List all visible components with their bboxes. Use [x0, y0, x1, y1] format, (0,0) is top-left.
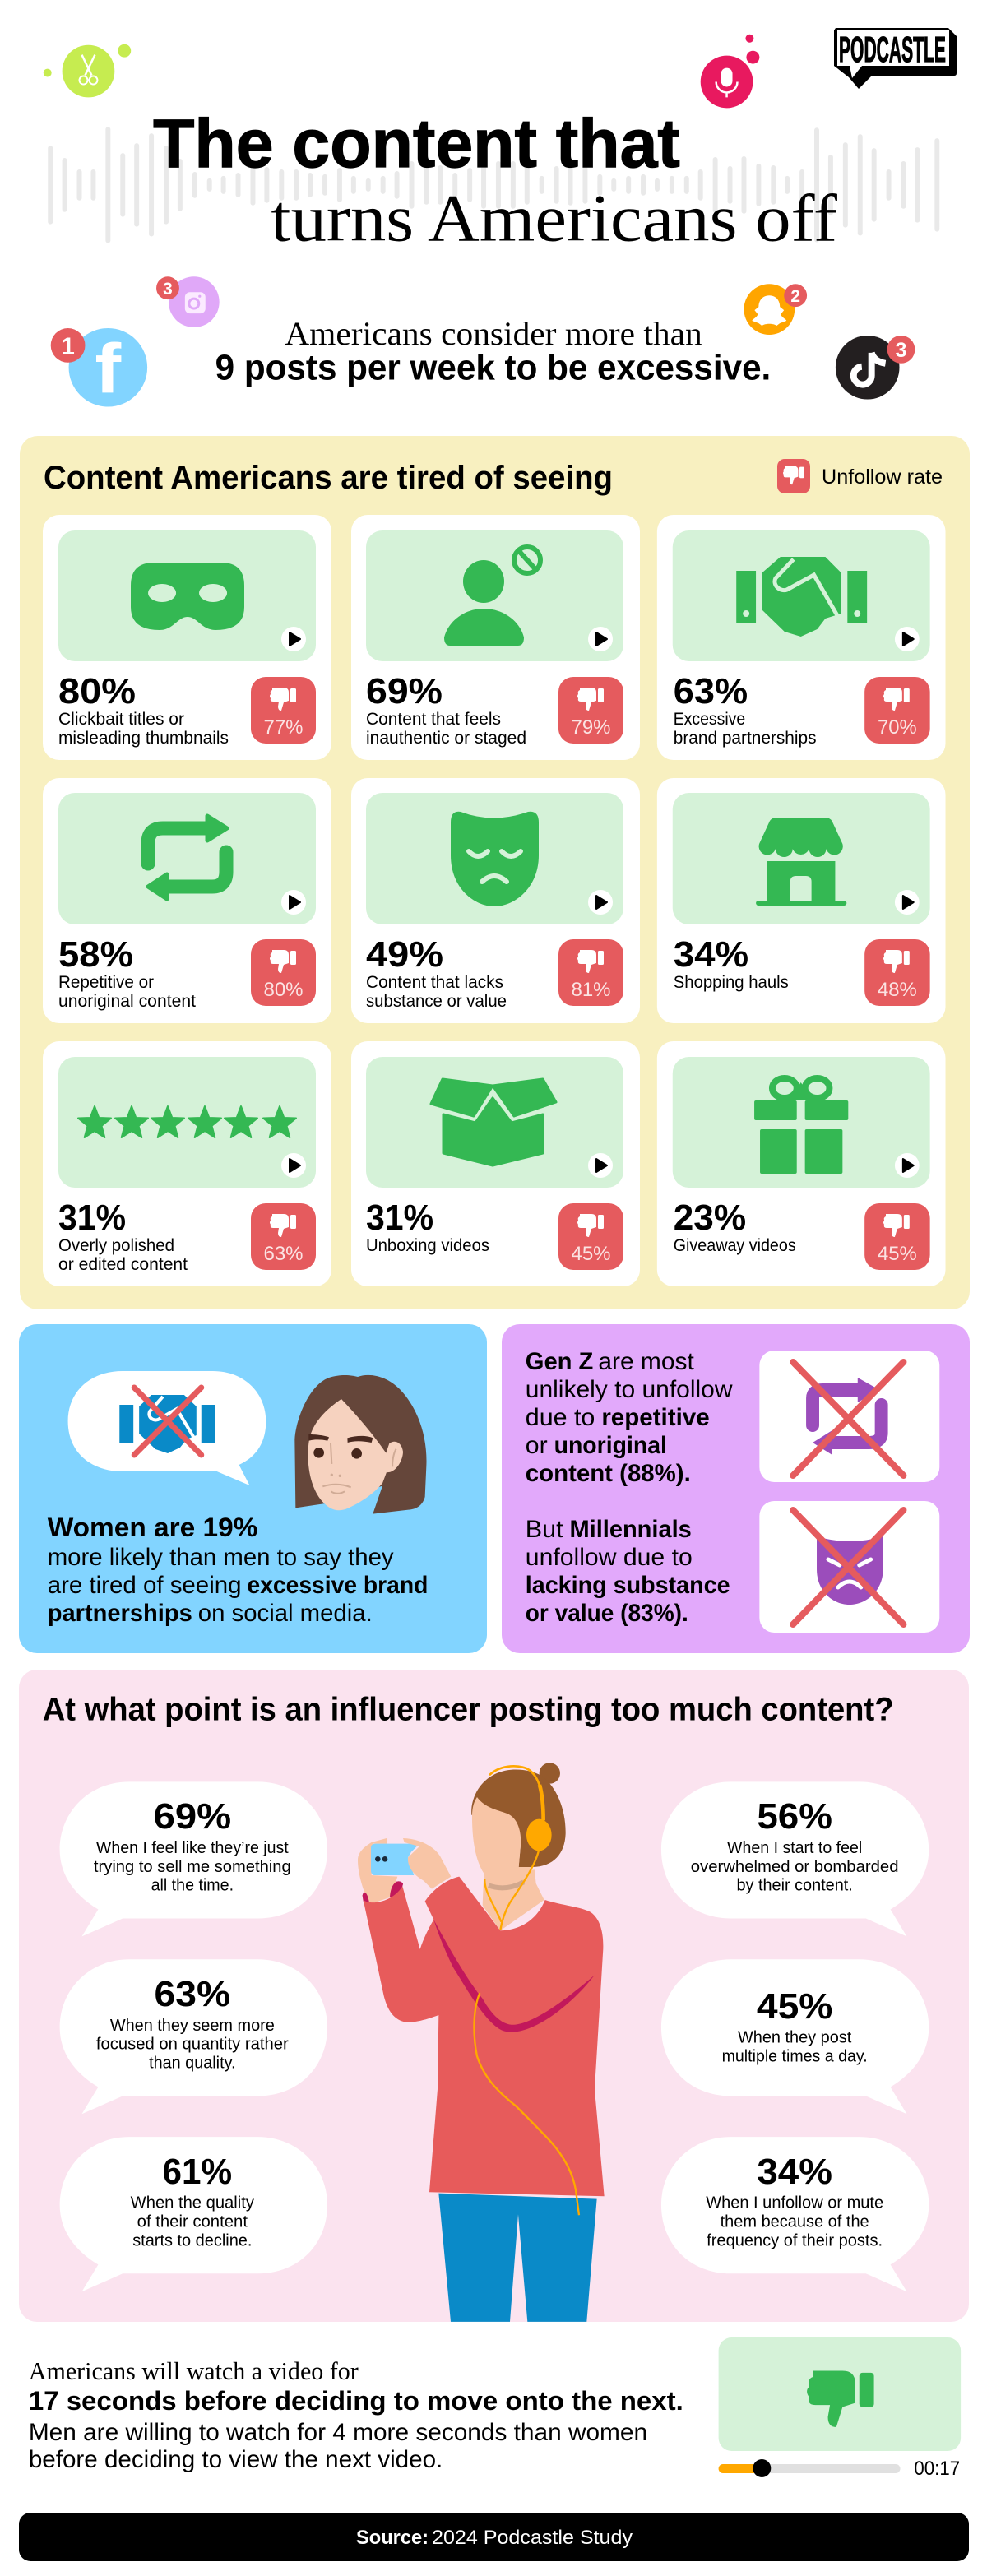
badge: unfollow 48%	[864, 939, 930, 1006]
card: lacks substance	[351, 778, 640, 1023]
bubble: 63%	[60, 1959, 327, 2114]
card: giveaway: 23%	[674, 1198, 746, 1238]
title: The content that	[153, 104, 680, 182]
icon: microphone bubble	[701, 35, 759, 108]
text: Millennials	[526, 1516, 730, 1627]
bubble: 69%: all the time.	[151, 1877, 234, 1895]
badge: unfollow 70%	[864, 677, 930, 744]
icon: facebook with badge: 1	[61, 333, 75, 360]
icon: open box	[431, 1079, 556, 1165]
card: inauthentic: 69%	[366, 671, 443, 711]
subtitle: 9 posts per week to be excessive.	[215, 348, 771, 388]
card: clickbait: Clickbait titles or	[58, 710, 184, 729]
card: overly polished	[43, 1041, 331, 1286]
panel: women callout	[19, 1324, 487, 1653]
bubble: 34%	[661, 2137, 929, 2291]
text: Millennials: Millennials	[570, 1516, 692, 1543]
illustration: person with phone	[358, 1763, 605, 2322]
subtitle: Americans consider more than	[285, 316, 702, 352]
text: Gen Z	[526, 1348, 733, 1487]
card: unboxing: Unboxing videos	[366, 1236, 489, 1255]
text: Millennials: or value (83%).	[526, 1600, 688, 1627]
bubble: 45%: When they post	[738, 2029, 852, 2047]
card: repetitive: Repetitive or	[58, 973, 154, 992]
card: lacks substance: substance or value	[366, 992, 507, 1011]
text: Gen Z: content (88%).	[526, 1460, 691, 1487]
heading: At what point is an influencer posting too much content?	[43, 1692, 894, 1728]
icon: repeat arrows	[148, 816, 227, 899]
text: video watch time: Americans will watch a video for	[29, 2356, 359, 2385]
card: shopping hauls	[657, 778, 946, 1023]
badge: unfollow 48%: 48%	[878, 979, 917, 1001]
icon: crossed repeat	[759, 1351, 939, 1482]
bubble: 56%: When I start to feel	[727, 1839, 862, 1857]
illustration: woman face	[294, 1375, 426, 1514]
card: repetitive: unoriginal content	[58, 992, 196, 1011]
bubble: 45%	[661, 1959, 929, 2114]
bubble: 69%: trying to sell me something	[94, 1858, 291, 1876]
badge: unfollow 63%: 63%	[263, 1243, 304, 1265]
text: video watch time	[29, 2356, 683, 2473]
bubble: 45%: multiple times a day.	[722, 2048, 868, 2066]
bubble: 56%: by their content.	[737, 1877, 853, 1895]
card: unboxing	[351, 1041, 640, 1286]
bubble: 34%: 34%	[757, 2152, 832, 2192]
card: brand partnerships: brand partnerships	[674, 729, 817, 748]
bubble: 61%	[60, 2137, 327, 2291]
card: clickbait: misleading thumbnails	[58, 729, 229, 748]
icon: mask	[131, 563, 244, 630]
badge: unfollow 45%	[864, 1203, 930, 1270]
icon: crossed mask	[759, 1501, 939, 1633]
panel: content Americans are tired of seeing	[20, 436, 970, 1309]
badge: unfollow 45%	[558, 1203, 623, 1270]
text: Millennials: But	[526, 1516, 563, 1543]
icon: instagram with badge	[156, 276, 220, 327]
bubble: 63%: than quality.	[149, 2055, 236, 2073]
text block: excessive brand	[247, 1572, 428, 1599]
heading: Content Americans are tired of seeing	[44, 460, 613, 496]
badge: unfollow 77%	[251, 677, 316, 744]
bubble: 61%: of their content	[137, 2213, 248, 2231]
icon: tiktok with badge: 3	[896, 339, 906, 362]
bubble: 56%: overwhelmed or bombarded	[691, 1858, 899, 1876]
icon: facebook with badge	[51, 328, 147, 409]
card: lacks substance: 49%	[366, 934, 443, 975]
card: brand partnerships: 63%	[674, 671, 748, 711]
icon: snapchat with badge: 2	[790, 287, 800, 306]
text: Millennials: lacking substance	[526, 1572, 730, 1599]
progress bar	[719, 2458, 960, 2480]
badge: unfollow 79%	[558, 677, 623, 744]
card: giveaway: Giveaway videos	[674, 1236, 796, 1255]
icon: tiktok with badge	[836, 336, 915, 400]
icon: thumbs down	[807, 2370, 874, 2427]
icon: sad mask	[451, 812, 539, 906]
card: repetitive	[43, 778, 331, 1023]
bubble: 63%: 63%	[155, 1974, 230, 2014]
text: Gen Z: due to	[526, 1404, 595, 1431]
badge: unfollow 81%	[558, 939, 623, 1006]
badge: unfollow 77%: 77%	[263, 716, 304, 739]
text: Gen Z: repetitive	[601, 1404, 710, 1431]
text block: Women are 19%	[48, 1513, 257, 1542]
card: shopping hauls: Shopping hauls	[674, 973, 789, 992]
card: inauthentic: Content that feels	[366, 710, 501, 729]
bubble: 61%: 61%	[163, 2152, 232, 2192]
card: overly polished: Overly polished	[58, 1236, 174, 1255]
card: unboxing: 31%	[366, 1198, 433, 1238]
text block: partnerships	[48, 1600, 192, 1627]
card: repetitive: 58%	[58, 934, 133, 975]
badge: unfollow 45%: 45%	[571, 1243, 611, 1265]
bubble: 56%	[661, 1781, 929, 1936]
badge: unfollow 80%: 80%	[263, 979, 304, 1001]
progress bar: 00:17	[914, 2458, 960, 2480]
bubble: 69%: 69%	[154, 1796, 231, 1837]
source bar: Source:	[356, 2527, 429, 2549]
bubble: 34%: frequency of their posts.	[707, 2231, 883, 2249]
card: brand partnerships: Excessive	[674, 710, 745, 729]
badge: unfollow 63%	[251, 1203, 316, 1270]
legend: unfollow rate	[777, 459, 943, 493]
source bar: 2024 Podcastle Study	[432, 2527, 633, 2549]
icon: instagram with badge: 3	[163, 280, 173, 299]
text: Gen Z: are most	[598, 1348, 694, 1375]
card: lacks substance: Content that lacks	[366, 973, 503, 992]
video player	[719, 2337, 961, 2480]
text block: are tired of seeing	[48, 1572, 242, 1599]
bubble: 45%: 45%	[757, 1986, 832, 2027]
card: overly polished: 31%	[58, 1198, 126, 1238]
badge: unfollow 80%	[251, 939, 316, 1006]
icon: six stars	[78, 1106, 296, 1137]
icon: person with ban sign	[444, 547, 540, 646]
card: shopping hauls: 34%	[674, 934, 748, 975]
card: clickbait	[43, 515, 331, 760]
card: giveaway	[657, 1041, 946, 1286]
card: overly polished: or edited content	[58, 1255, 188, 1274]
text: Gen Z: or	[526, 1432, 548, 1459]
badge: unfollow 81%: 81%	[571, 979, 611, 1001]
bubble: 69%: When I feel like they’re just	[96, 1839, 289, 1857]
bubble: 56%: 56%	[757, 1796, 832, 1837]
text block	[48, 1513, 428, 1627]
card: brand partnerships	[657, 515, 946, 760]
panel: influencer posting too much	[19, 1670, 969, 2322]
panel: generations	[502, 1324, 970, 1653]
title	[153, 104, 838, 256]
source bar	[19, 2513, 969, 2561]
bubble: 63%: When they seem more	[110, 2017, 275, 2035]
text: video watch time: before deciding to view the next video.	[29, 2446, 443, 2473]
waveform background	[50, 129, 937, 241]
bubble: 69%	[60, 1781, 327, 1936]
legend: unfollow rate: Unfollow rate	[822, 466, 943, 489]
text block: on social media.	[198, 1600, 373, 1627]
bubble: 63%: focused on quantity rather	[96, 2036, 289, 2054]
bubble: 34%: When I unfollow or mute	[706, 2194, 883, 2212]
speech bubble with crossed handshake	[68, 1371, 266, 1485]
text: Millennials: unfollow due to	[526, 1544, 693, 1571]
badge: unfollow 45%: 45%	[878, 1243, 917, 1265]
bubble: 61%: When the quality	[131, 2194, 254, 2212]
text: video watch time: 17 seconds before deciding to move onto the next.	[29, 2386, 683, 2416]
card: inauthentic: inauthentic or staged	[366, 729, 526, 748]
icon: handshake	[736, 557, 867, 637]
text: video watch time: Men are willing to watch for 4 more seconds than women	[29, 2419, 647, 2446]
bubble: 34%: them because of the	[721, 2213, 869, 2231]
icon: facebook with badge: f	[95, 331, 122, 409]
card: inauthentic	[351, 515, 640, 760]
text: Gen Z: unoriginal	[554, 1432, 667, 1459]
text block: more likely than men to say they	[48, 1544, 394, 1571]
title: turns Americans off	[271, 181, 838, 256]
badge: unfollow 79%: 79%	[571, 716, 611, 739]
badge: unfollow 70%: 70%	[878, 716, 917, 739]
bubble: 61%: starts to decline.	[132, 2231, 252, 2249]
subtitle	[215, 316, 771, 388]
header	[44, 35, 937, 409]
logo: Podcastle	[834, 28, 957, 89]
icon: snapchat with badge	[744, 284, 807, 335]
text: Gen Z: Gen Z	[526, 1348, 593, 1375]
icon: storefront	[756, 818, 846, 906]
icon: scissors bubble	[44, 44, 131, 97]
icon: gift	[754, 1078, 848, 1174]
text: Gen Z: unlikely to unfollow	[526, 1376, 733, 1403]
card: clickbait: 80%	[58, 671, 136, 711]
